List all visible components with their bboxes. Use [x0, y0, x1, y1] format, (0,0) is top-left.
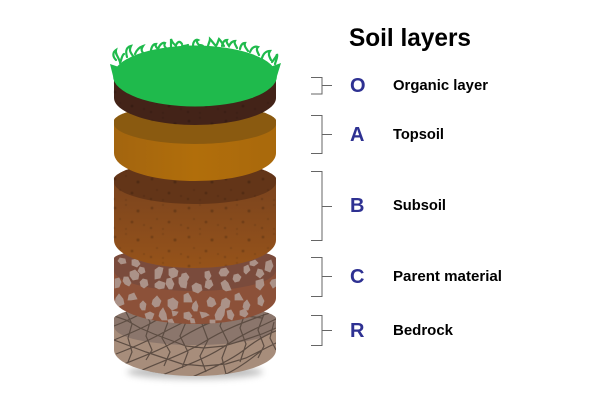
label: Subsoil: Subsoil [393, 198, 446, 214]
letter B: B [350, 195, 364, 217]
letter C: C [350, 266, 364, 288]
base shadow [127, 365, 263, 379]
bedrock cracks [114, 312, 276, 376]
title: Soil layers [349, 24, 471, 52]
layer R: bedrock [114, 312, 276, 376]
layer B: subsoil [114, 160, 276, 268]
label: Parent material: Parent material [393, 269, 502, 285]
letter R: R [350, 320, 365, 342]
stones [115, 258, 276, 324]
bracket A [311, 116, 332, 154]
bracket R [311, 316, 332, 346]
grass top [110, 39, 281, 106]
label: Bedrock: Bedrock [393, 323, 454, 339]
grass blades [113, 39, 277, 64]
bracket B [311, 172, 332, 240]
label: Organic layer: Organic layer [393, 78, 488, 94]
letter O: O [350, 75, 366, 97]
layer A: topsoil [114, 104, 276, 181]
layer O: organic [114, 78, 276, 125]
letter A: A [350, 124, 364, 146]
bracket C [311, 258, 332, 296]
layer C: parent material [114, 254, 276, 324]
bracket O [311, 78, 332, 94]
label: Topsoil: Topsoil [393, 127, 444, 143]
